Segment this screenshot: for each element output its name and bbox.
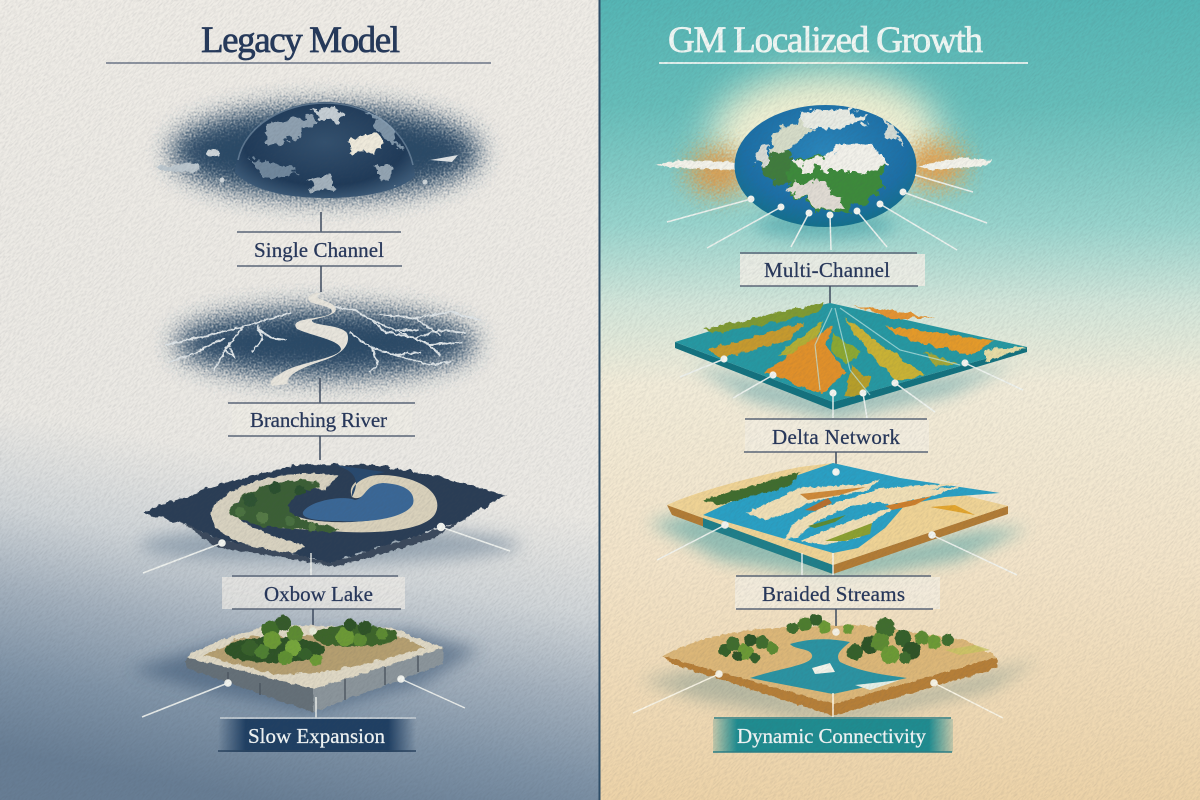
illustration: braided streams xyxy=(648,463,1028,580)
illustration: dynamic connectivity island xyxy=(633,614,1040,725)
label: Multi-Channel: Multi-Channel xyxy=(764,258,890,282)
panel: GM localized growth xyxy=(600,0,1200,800)
label: Braided Streams xyxy=(735,576,940,609)
label: Dynamic Connectivity xyxy=(713,718,953,752)
illustration: delta network xyxy=(675,303,1027,420)
panel: legacy model xyxy=(0,0,600,800)
illustration: branching river xyxy=(166,293,480,403)
label: Branching River: Branching River xyxy=(250,408,387,432)
label: Braided Streams: Braided Streams xyxy=(762,582,905,606)
illustration: vibrant globe xyxy=(655,73,992,250)
title: Legacy Model: Legacy Model xyxy=(201,20,400,61)
label: Oxbow Lake xyxy=(222,576,405,609)
illustration: slow expansion island xyxy=(130,615,480,718)
label: Slow Expansion: Slow Expansion xyxy=(248,724,386,748)
label: Single Channel xyxy=(237,232,402,266)
label: Slow Expansion xyxy=(218,718,416,752)
title: GM Localized Growth: GM Localized Growth xyxy=(668,20,984,61)
label: Multi-Channel xyxy=(740,253,925,286)
label: Branching River xyxy=(228,403,415,436)
label: Single Channel: Single Channel xyxy=(254,238,384,262)
label: Oxbow Lake: Oxbow Lake xyxy=(264,582,373,606)
illustration: oxbow lake xyxy=(140,464,520,576)
illustration: muted globe xyxy=(155,102,480,232)
label: Delta Network xyxy=(744,419,929,452)
label: Dynamic Connectivity: Dynamic Connectivity xyxy=(737,724,926,748)
label: Delta Network: Delta Network xyxy=(772,425,900,449)
